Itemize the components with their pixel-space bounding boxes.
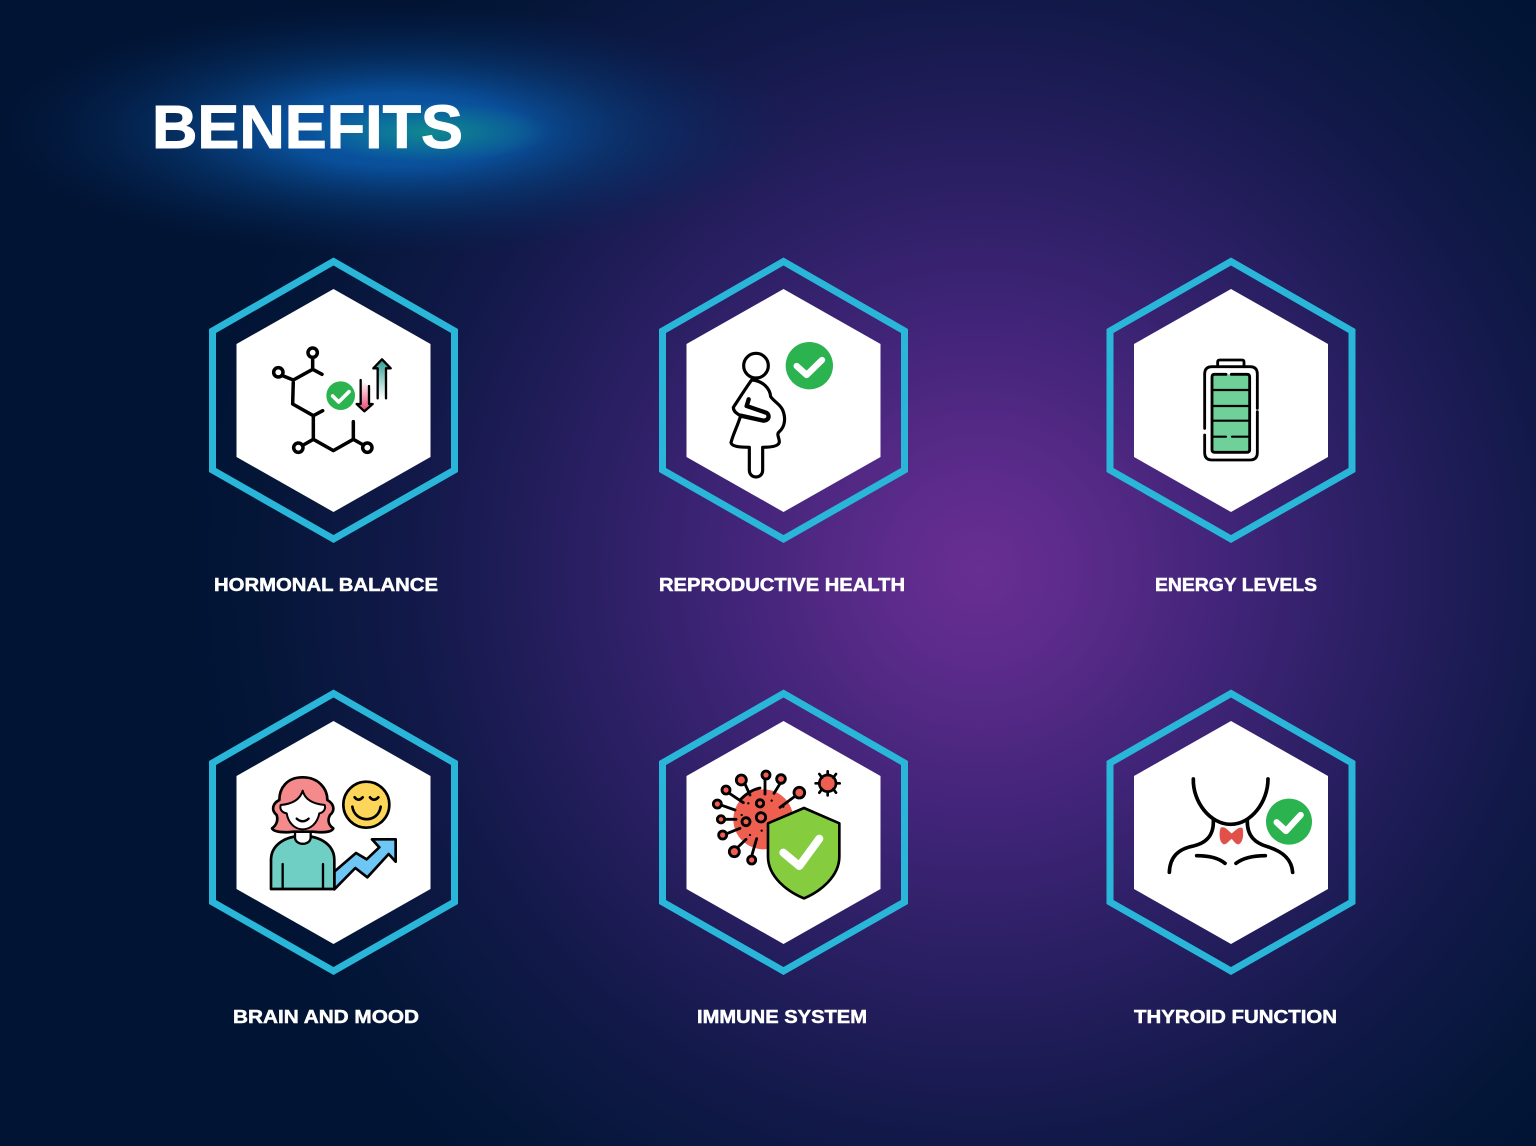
label: IMMUNE SYSTEM bbox=[697, 1006, 867, 1027]
icon: full battery bbox=[1205, 360, 1257, 460]
hexagon frame bbox=[1110, 694, 1352, 971]
label: THYROID FUNCTION bbox=[1134, 1006, 1337, 1027]
icon: pregnant woman with check bbox=[731, 342, 833, 477]
panel: immune system bbox=[662, 694, 904, 1027]
label: HORMONAL BALANCE bbox=[214, 574, 438, 595]
hexagon frame bbox=[212, 262, 454, 539]
hexagon frame bbox=[662, 694, 904, 971]
icon: molecule with check and arrows bbox=[274, 348, 391, 452]
icon: neck with thyroid and check bbox=[1169, 779, 1312, 872]
title: BENEFITS bbox=[152, 93, 463, 161]
panel: thyroid function bbox=[1110, 694, 1352, 1027]
hexagon frame bbox=[212, 694, 454, 971]
label: BRAIN AND MOOD bbox=[233, 1006, 419, 1027]
panel: reproductive health bbox=[659, 262, 905, 595]
panel: brain and mood bbox=[212, 694, 454, 1027]
panel: hormonal balance bbox=[212, 262, 454, 595]
hexagon frame bbox=[1110, 262, 1352, 539]
icon: woman with smiley and rising arrow bbox=[271, 777, 396, 889]
label: REPRODUCTIVE HEALTH bbox=[659, 574, 905, 595]
icon: virus and shield bbox=[713, 771, 840, 898]
hexagon frame bbox=[662, 262, 904, 539]
panel: energy levels bbox=[1110, 262, 1352, 595]
label: ENERGY LEVELS bbox=[1155, 574, 1317, 595]
